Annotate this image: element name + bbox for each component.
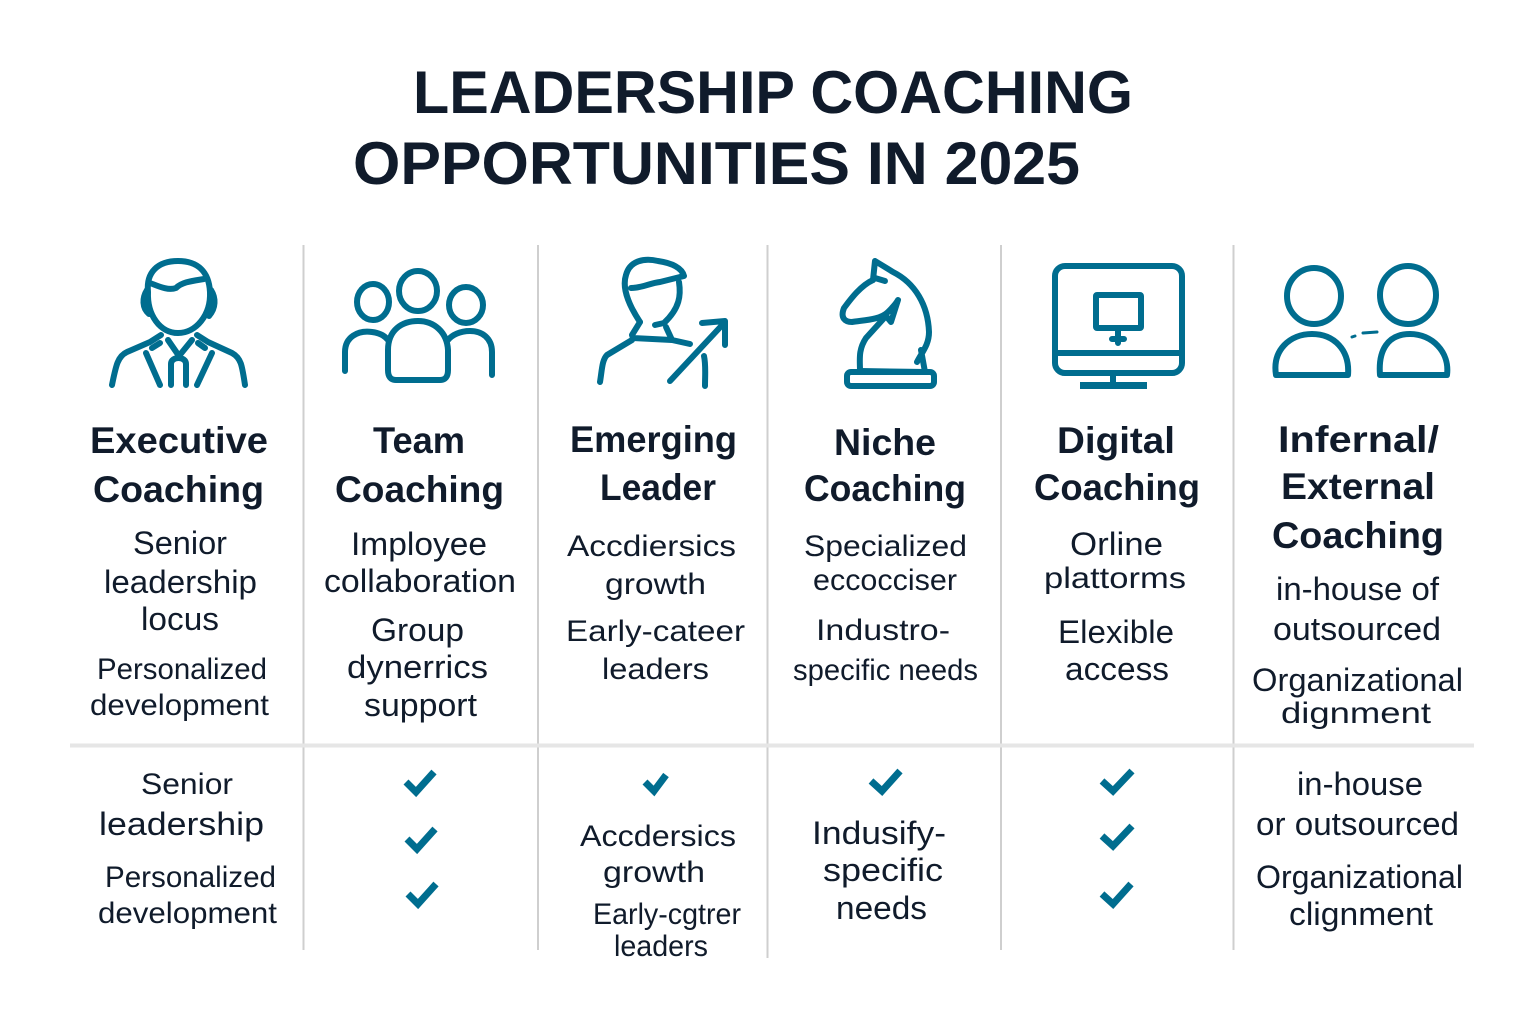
text: emerging lower row: Early-cgtrer	[593, 898, 741, 931]
text: internal external description: Organizational	[1252, 662, 1463, 698]
text: internal external description: dignment	[1281, 697, 1432, 730]
panel: internal and external coaching	[1252, 266, 1463, 932]
text: niche description: specific needs	[793, 654, 978, 687]
text: emerging description: leaders	[602, 653, 709, 686]
text: internal external lower row: or outsourced	[1256, 806, 1459, 842]
text: emerging description: Early-cateer	[566, 615, 745, 648]
text: niche description	[793, 530, 978, 687]
text: niche lower row	[812, 815, 946, 926]
icon: computer monitor	[1055, 266, 1182, 385]
icon: three check marks	[1102, 771, 1132, 904]
text: internal external lower row: in-house	[1297, 766, 1423, 802]
text: emerging description	[566, 530, 745, 686]
icon: executive in suit	[112, 261, 245, 385]
panel: executive coaching	[90, 261, 278, 930]
text: team description: collaboration	[324, 563, 516, 599]
heading: internal external coaching: External	[1281, 466, 1435, 507]
heading: emerging leader: Leader	[600, 467, 716, 508]
text: executive lower row: Personalized	[105, 861, 276, 894]
icon: connecting dash	[1352, 332, 1377, 337]
text: emerging lower row: Accdersics	[580, 820, 736, 853]
text: digital description: access	[1065, 651, 1169, 687]
icon: chess knight	[843, 261, 934, 386]
text: team description: Imployee	[351, 526, 487, 562]
text: emerging lower row: leaders	[614, 930, 708, 963]
title: OPPORTUNITIES IN 2025	[353, 130, 1080, 197]
text: internal external description: in-house of	[1276, 571, 1439, 607]
icon: check mark	[871, 771, 900, 791]
text: digital description: Orline	[1070, 526, 1163, 562]
text: niche lower row: needs	[836, 890, 927, 926]
text: executive description: development	[90, 689, 270, 722]
text: team description	[324, 526, 516, 723]
text: executive description: leadership	[104, 564, 257, 600]
panel: emerging leader	[566, 260, 745, 963]
panel: niche coaching	[793, 261, 978, 926]
text: emerging lower row: growth	[603, 856, 705, 889]
heading: internal external coaching	[1272, 419, 1444, 556]
text: digital description	[1044, 526, 1186, 687]
heading: executive coaching: Coaching	[93, 469, 264, 510]
text: executive description: locus	[141, 601, 219, 637]
heading: digital coaching: Digital	[1057, 420, 1175, 461]
text: niche description: Industro-	[816, 614, 950, 647]
text: executive lower row: Senior	[141, 768, 233, 801]
text: niche lower row: Indusify-	[812, 815, 946, 851]
text: emerging description: Accdiersics	[567, 530, 736, 563]
icon: check mark	[645, 775, 666, 791]
heading: executive coaching	[90, 420, 268, 510]
text: internal external lower row: Organizational	[1256, 859, 1463, 895]
panel: team coaching	[324, 271, 516, 904]
text: executive description: Senior	[133, 525, 227, 561]
title	[353, 59, 1133, 197]
text: niche lower row: specific	[823, 852, 943, 888]
text: team description: dynerrics	[347, 649, 488, 685]
heading: executive coaching: Executive	[90, 420, 268, 461]
text: digital description: plattorms	[1044, 562, 1186, 595]
text: executive description: Personalized	[97, 653, 267, 686]
heading: niche coaching: Coaching	[804, 468, 966, 509]
icon: monitor stand base	[1080, 382, 1147, 389]
text: team description: Group	[371, 612, 464, 648]
heading: niche coaching	[804, 422, 966, 509]
icon: three check marks	[406, 772, 436, 904]
heading: digital coaching	[1034, 420, 1200, 508]
heading: emerging leader: Emerging	[570, 419, 737, 460]
text: executive description	[90, 525, 270, 722]
heading: team coaching	[335, 420, 504, 510]
icon: team of three	[345, 271, 492, 380]
text: internal external description	[1252, 571, 1463, 730]
icon: two people	[1275, 266, 1447, 375]
heading: digital coaching: Coaching	[1034, 467, 1200, 508]
text: internal external lower row: clignment	[1289, 896, 1433, 932]
heading: niche coaching: Niche	[834, 422, 936, 463]
heading: internal external coaching: Coaching	[1272, 515, 1444, 556]
text: executive lower row: development	[98, 897, 278, 930]
text: internal external description: outsourced	[1273, 611, 1441, 647]
heading: internal external coaching: Infernal/	[1278, 419, 1439, 460]
heading: team coaching: Coaching	[335, 469, 504, 510]
title: LEADERSHIP COACHING	[413, 59, 1133, 126]
text: emerging lower row	[580, 820, 741, 963]
text: executive lower row	[98, 768, 278, 930]
text: executive lower row: leadership	[99, 806, 264, 842]
text: digital description: Elexible	[1058, 614, 1174, 650]
text: niche description: eccocciser	[813, 564, 957, 597]
text: internal external lower row	[1256, 766, 1463, 932]
text: team description: support	[364, 687, 477, 723]
text: niche description: Specialized	[804, 530, 967, 563]
icon: person with rising arrow	[600, 260, 725, 386]
panel: digital coaching	[1034, 266, 1200, 904]
heading: team coaching: Team	[373, 420, 465, 461]
text: emerging description: growth	[605, 568, 706, 601]
heading: emerging leader	[570, 419, 737, 508]
